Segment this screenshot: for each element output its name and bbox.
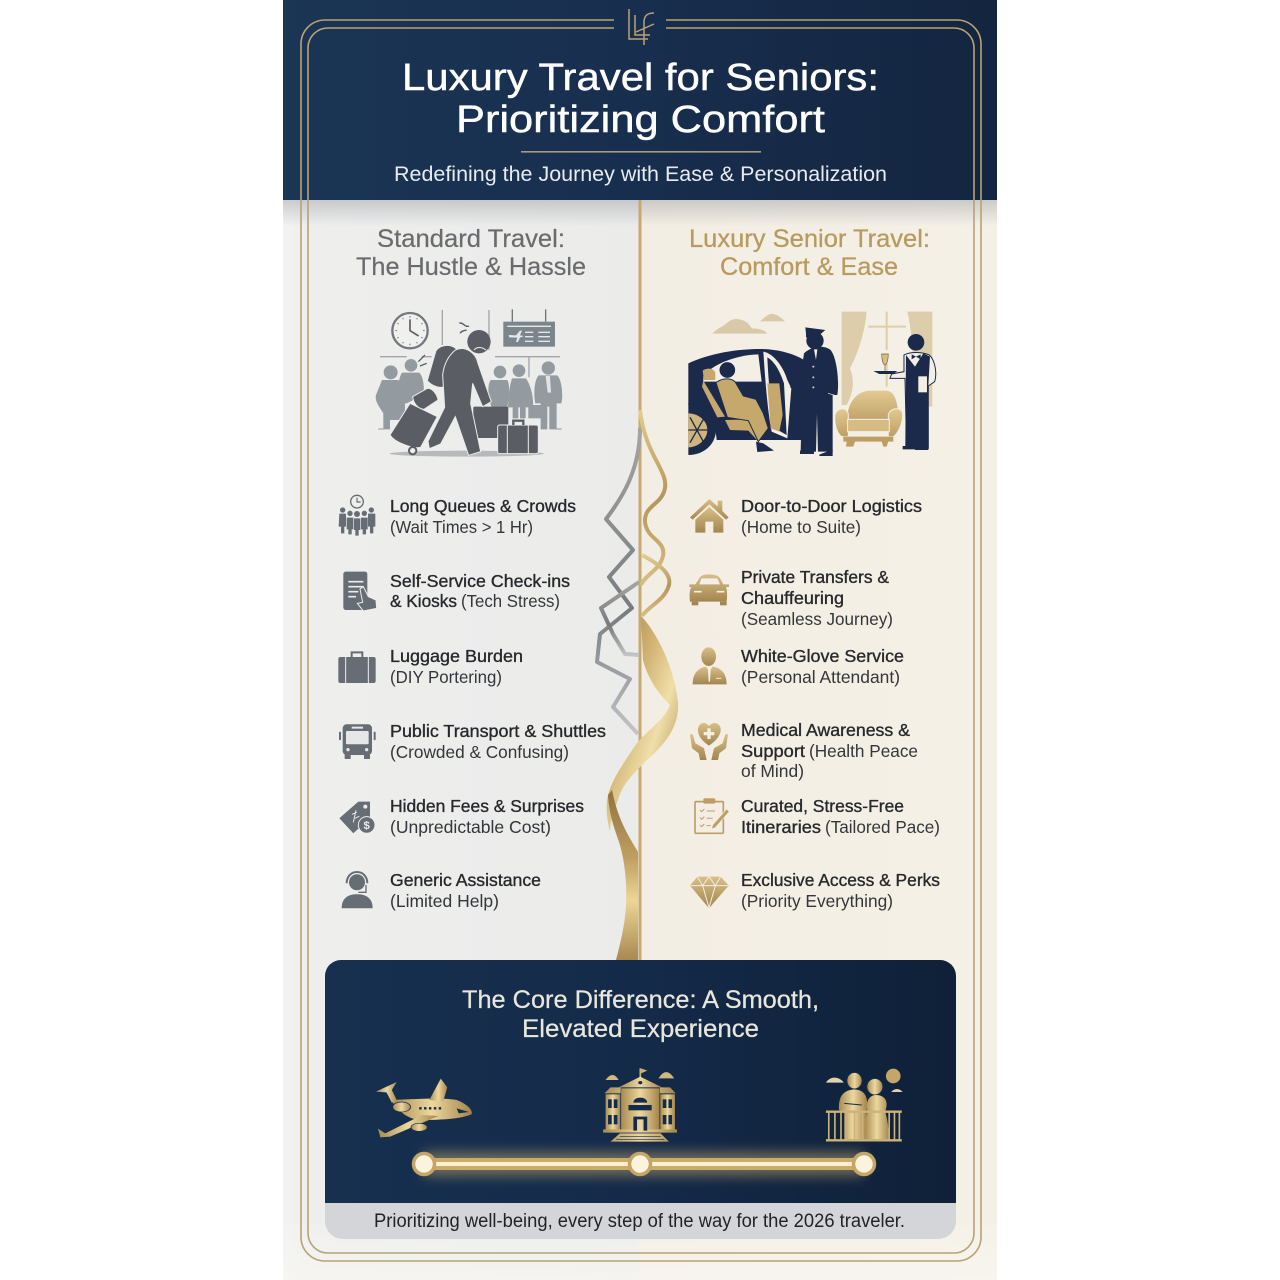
icon: car: [689, 574, 729, 605]
item: generic assistance: (Limited Help): [390, 891, 499, 911]
item: luggage burden: (DIY Portering): [390, 667, 502, 687]
panel background: [325, 960, 956, 1203]
item: curated itineraries: Curated, Stress-Free: [741, 796, 904, 816]
header band: [283, 0, 997, 226]
item: medical awareness: (Health Peace: [809, 741, 918, 761]
ribbon: stress zigzag and gold ribbon: [597, 410, 678, 960]
item: self-service: (Tech Stress): [461, 591, 560, 611]
item: generic assistance: [342, 870, 541, 911]
icon: private jet: [376, 1079, 472, 1137]
icon: price tag and dollar: [339, 802, 375, 833]
icon: personal attendant: [693, 647, 727, 684]
panel: standard travel content: [338, 225, 606, 911]
bottom paper fade: [283, 1225, 997, 1280]
title: Prioritizing Comfort: [456, 99, 826, 141]
panel heading: Elevated Experience: [522, 1015, 759, 1043]
subtitle: Redefining the Journey with Ease & Personalization: [394, 162, 887, 186]
item: white-glove: White-Glove Service: [741, 646, 904, 666]
illustration: stressed traveler in airport: [376, 309, 562, 457]
item: door-to-door: [690, 496, 922, 537]
item: hidden fees: Hidden Fees & Surprises: [390, 796, 584, 816]
item: medical awareness: of Mind): [741, 761, 804, 781]
item: curated itineraries: [695, 796, 940, 837]
item: medical awareness: [690, 720, 918, 781]
icon: house: [690, 499, 729, 533]
item: medical awareness: Medical Awareness &: [741, 720, 910, 740]
icon: LF monogram logo: [629, 9, 654, 45]
item: private transfers: Chauffeuring: [741, 588, 844, 608]
title divider: [521, 151, 761, 153]
icon: suitcase: [338, 652, 376, 683]
list: standard travel pain points: [338, 495, 606, 911]
heading: luxury senior travel: Comfort & Ease: [720, 253, 898, 281]
item: long queues: (Wait Times > 1 Hr): [390, 517, 533, 537]
panel heading: [462, 986, 819, 1043]
item: private transfers: (Seamless Journey): [741, 609, 893, 629]
item: hidden fees: (Unpredictable Cost): [390, 817, 551, 837]
item: exclusive access: [690, 870, 940, 911]
footer text: Prioritizing well-being, every step of the way for the 2026 traveler.: [374, 1211, 905, 1232]
icon: bus: [339, 724, 376, 759]
item: curated itineraries: (Tailored Pace): [825, 817, 940, 837]
item: luggage burden: [338, 646, 523, 687]
item: white-glove: (Personal Attendant): [741, 667, 900, 687]
icon: grand hotel: [603, 1068, 677, 1142]
item: long queues: Long Queues & Crowds: [390, 496, 576, 516]
item: hidden fees: [339, 796, 584, 837]
panel: luxury travel background: [639, 200, 997, 1280]
item: public transport: Public Transport & Shuttles: [390, 721, 606, 741]
heading: standard travel: The Hustle & Hassle: [356, 253, 586, 281]
item: public transport: [339, 721, 606, 762]
timeline: glowing journey line: [414, 1152, 874, 1176]
item: door-to-door: (Home to Suite): [741, 517, 861, 537]
item: public transport: (Crowded & Confusing): [390, 742, 569, 762]
item: medical awareness: Support: [741, 741, 805, 761]
item: self-service: Self-Service Check-ins: [390, 571, 570, 591]
item: white-glove: [693, 646, 904, 687]
item: private transfers: Private Transfers &: [741, 567, 889, 587]
footer band: [325, 1203, 956, 1239]
item: self-service: & Kiosks: [390, 591, 457, 611]
item: exclusive access: Exclusive Access & Perks: [741, 870, 940, 890]
icon: tablet with hand: [343, 572, 377, 611]
title: [402, 57, 879, 141]
item: generic assistance: Generic Assistance: [390, 870, 541, 890]
decorative gold frame: [301, 20, 981, 1261]
icon: clipboard and pencil: [695, 798, 729, 833]
heading: standard travel: [356, 225, 586, 281]
heading: luxury senior travel: Luxury Senior Travel:: [689, 225, 930, 253]
icon: hands holding heart: [690, 723, 728, 760]
item: luggage burden: Luggage Burden: [390, 646, 523, 666]
item: self-service: [343, 571, 570, 611]
panel: core difference: [325, 960, 956, 1239]
icon: senior couple on balcony: [826, 1069, 903, 1140]
item: curated itineraries: Itineraries: [741, 817, 821, 837]
central divider line: [638, 200, 642, 1239]
icon: headset agent: [342, 872, 373, 908]
panel: luxury travel content: [688, 225, 940, 911]
icon: clock and crowd: [339, 495, 375, 536]
item: door-to-door: Door-to-Door Logistics: [741, 496, 922, 516]
heading: luxury senior travel: [689, 225, 930, 281]
heading: standard travel: Standard Travel:: [377, 225, 565, 253]
icon: diamond: [690, 877, 729, 908]
illustration: chauffeur, car and butler: [688, 312, 936, 456]
item: long queues: [339, 495, 576, 537]
item: private transfers: [689, 567, 893, 629]
title: Luxury Travel for Seniors:: [402, 57, 879, 99]
panel: standard travel background: [283, 200, 639, 1280]
list: luxury benefits: [689, 496, 940, 911]
panel heading: The Core Difference: A Smooth,: [462, 986, 819, 1014]
icon: price tag and dollar: $: [364, 820, 371, 832]
item: exclusive access: (Priority Everything): [741, 891, 893, 911]
